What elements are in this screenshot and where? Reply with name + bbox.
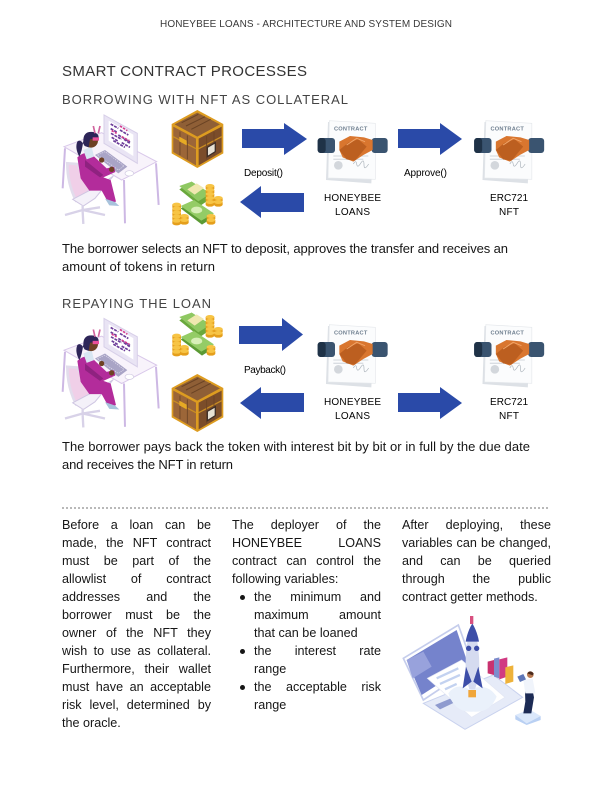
label: Honeybee loans — [324, 397, 381, 422]
icon: tokens paid back — [172, 313, 223, 356]
column: loan requirements: made, the NFT contract — [62, 536, 211, 550]
icon: treasure chest returned — [172, 374, 223, 432]
column: loan requirements: owner of the NFT they — [62, 626, 211, 640]
icon: tokens received — [172, 182, 223, 225]
arrow: deposit right — [242, 123, 307, 155]
label: Approve(): Approve() — [404, 168, 447, 179]
label: ERC721 NFT — [490, 193, 528, 218]
label: ERC721 NFT: NFT — [499, 411, 519, 422]
column: deployer variables: range — [254, 662, 286, 676]
column: deployer variables — [232, 518, 381, 712]
icon: ERC721 contract handshake: CONTRACT — [490, 127, 524, 133]
label: Honeybee loans: LOANS — [335, 207, 370, 218]
icon: Honeybee contract handshake — [318, 325, 388, 387]
column: after deploying: variables can be changed, — [402, 536, 551, 550]
heading: repaying the loan: REPAYING THE LOAN — [62, 296, 211, 311]
label: Honeybee loans: HONEYBEE — [324, 397, 381, 408]
column: loan requirements: addresses and the — [62, 590, 211, 604]
column: loan requirements: must be part of the — [62, 554, 211, 568]
text: borrowing description — [62, 241, 508, 274]
text: repaying description — [62, 439, 530, 472]
column: after deploying: through the public — [402, 572, 551, 586]
column: loan requirements — [62, 518, 211, 730]
label: ERC721 NFT: ERC721 — [490, 397, 528, 408]
label: Payback(): Payback() — [244, 365, 286, 376]
column: loan requirements: borrower must be the — [62, 608, 211, 622]
icon: Honeybee contract handshake: CONTRACT — [334, 331, 368, 337]
text: repaying description: and receives the NFT in return — [62, 457, 233, 472]
column: loan requirements: Before a loan can be — [62, 518, 211, 532]
illustration: borrower at computer — [63, 115, 159, 224]
icon: treasure chest NFT — [172, 110, 223, 168]
arrow: tokens returned left — [240, 186, 304, 218]
icon: ERC721 contract handshake: CONTRACT — [490, 331, 524, 337]
column: deployer variables: that can be loaned — [254, 626, 358, 640]
column: deployer variables: The deployer of the — [232, 518, 381, 532]
label: Honeybee loans — [324, 193, 381, 218]
arrow: payback right — [239, 318, 303, 351]
column: after deploying: After deploying, these — [402, 518, 551, 532]
text: borrowing description: amount of tokens in return — [62, 259, 215, 274]
column: deployer variables: the interest rate — [254, 644, 381, 658]
column: deployer variables: contract can control the — [232, 554, 381, 568]
arrow: NFT returned left — [240, 387, 304, 419]
text: repaying description: The borrower pays back the token with interest bit by bit or in full by the due date — [62, 439, 530, 454]
column: deployer variables: following variables: — [232, 572, 338, 586]
column: loan requirements: wish to use as collateral. — [62, 644, 211, 658]
icon: Honeybee contract handshake: CONTRACT — [334, 127, 368, 133]
column: loan requirements: the oracle. — [62, 716, 121, 730]
label: ERC721 NFT: ERC721 — [490, 193, 528, 204]
column: deployer variables: the acceptable risk — [254, 680, 381, 694]
label: Honeybee loans: LOANS — [335, 411, 370, 422]
illustration: rocket launching from laptop — [403, 616, 541, 729]
column: loan requirements: risk level, determined by — [62, 698, 211, 712]
arrow: to ERC721 right — [398, 387, 462, 419]
column: loan requirements: must have an acceptable — [62, 680, 211, 694]
column: deployer variables: HONEYBEE LOANS — [232, 536, 381, 550]
illustration: borrower at computer, repaying — [63, 318, 159, 427]
label: ERC721 NFT — [490, 397, 528, 422]
icon: ERC721 contract handshake — [474, 121, 544, 183]
column: after deploying: and can be queried — [402, 554, 551, 568]
column: deployer variables: the minimum and — [254, 590, 381, 604]
heading: borrowing with NFT as collateral: BORROWING WITH NFT AS COLLATERAL — [62, 92, 348, 107]
icon: Honeybee contract handshake — [318, 121, 388, 183]
column: after deploying — [402, 518, 551, 604]
label: Honeybee loans: HONEYBEE — [324, 193, 381, 204]
column: loan requirements: Furthermore, their wallet — [62, 662, 211, 676]
label: ERC721 NFT: NFT — [499, 207, 519, 218]
page header: HONEYBEE LOANS - ARCHITECTURE AND SYSTEM DESIGN — [160, 19, 452, 30]
column: deployer variables: maximum amount — [254, 608, 381, 622]
arrow: approve right — [398, 123, 462, 155]
icon: ERC721 contract handshake — [474, 325, 544, 387]
column: deployer variables: range — [254, 698, 286, 712]
title: SMART CONTRACT PROCESSES — [62, 63, 307, 80]
text: borrowing description: The borrower selects an NFT to deposit, approves the transfer and receives an — [62, 241, 508, 256]
column: after deploying: contract getter methods. — [402, 590, 538, 604]
column: loan requirements: allowlist of contract — [62, 572, 211, 586]
label: Deposit(): Deposit() — [244, 168, 283, 179]
